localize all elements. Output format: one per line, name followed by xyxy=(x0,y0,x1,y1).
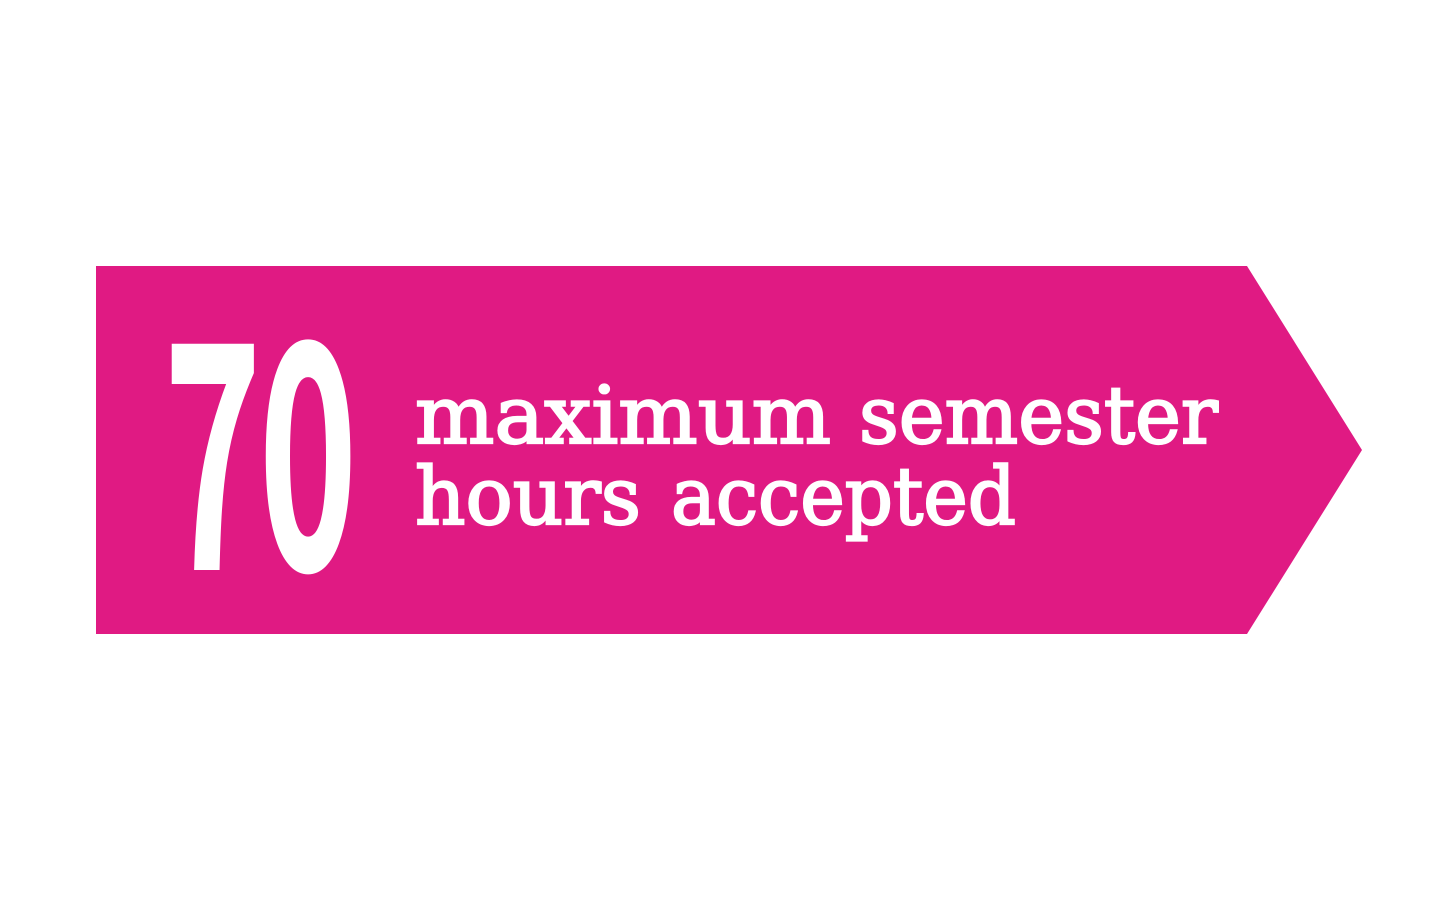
line 1 xyxy=(415,369,1219,462)
line 1: maximum xyxy=(415,369,831,462)
line 1: semester xyxy=(859,369,1219,462)
line 2: hours xyxy=(415,450,641,543)
description text xyxy=(415,369,1219,543)
big number 70: 7 xyxy=(164,208,261,659)
line 2 xyxy=(415,450,1016,543)
arrow banner shape xyxy=(96,266,1362,634)
big number 70: 0 xyxy=(259,209,357,659)
line 2: accepted xyxy=(671,450,1016,543)
big number 70 xyxy=(164,208,357,659)
